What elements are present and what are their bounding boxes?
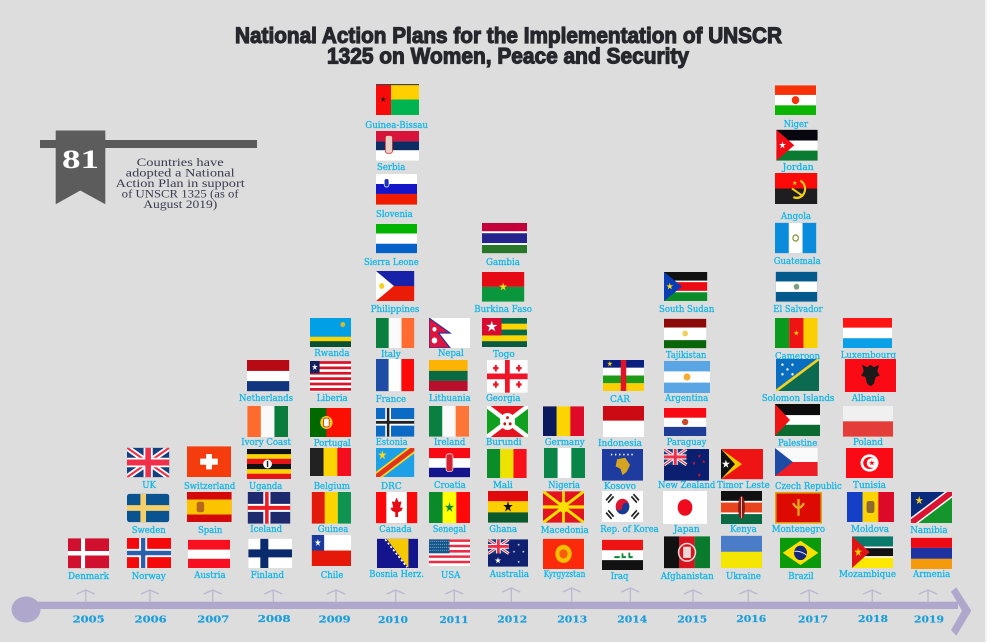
flag: Cameroon: Cameroon: [775, 352, 820, 362]
flag: Poland: [843, 406, 893, 448]
flag: Chile: Chile: [321, 571, 343, 581]
flag: Georgia: Georgia: [486, 394, 521, 404]
flag: Gambia: Gambia: [486, 258, 521, 268]
title: [235, 23, 782, 68]
callout text: Countries have: [137, 155, 224, 169]
title: 1325 on Women, Peace and Security: [327, 44, 690, 68]
flag: France: France: [376, 395, 406, 405]
flag: Uganda: Uganda: [249, 482, 283, 492]
flag: Afghanistan: [660, 536, 714, 582]
flag: Ivory Coast: [241, 406, 291, 448]
flag: Spain: Spain: [198, 526, 222, 536]
year labels: 2011: [440, 615, 468, 626]
year labels: 2005: [73, 614, 105, 626]
number 81: 81: [62, 145, 99, 174]
flag: Angola: [775, 173, 817, 222]
flag: Senegal: [429, 492, 470, 535]
flag: Uganda: [247, 449, 291, 492]
flag: Bosnia Herz.: [369, 539, 424, 580]
flag: Rep. of Korea: [600, 491, 659, 535]
flag: Mali: Mali: [493, 481, 513, 491]
flag: Portugal: Portugal: [314, 439, 351, 449]
flag: Angola: Angola: [780, 212, 812, 222]
flag: Germany: [543, 406, 586, 448]
flag: Slovenia: [376, 174, 417, 220]
flag: Cameroon: [775, 318, 820, 362]
flag: Solomon Islands: Solomon Islands: [762, 394, 835, 404]
flag: Burkina Faso: [474, 272, 532, 315]
flag: Australia: Australia: [489, 570, 530, 580]
flag: Mozambique: [839, 536, 896, 580]
flag: Indonesia: Indonesia: [598, 439, 643, 449]
year labels: 2009: [319, 614, 351, 626]
year labels: 2015: [677, 614, 707, 626]
flag: Ireland: [429, 406, 469, 448]
flag: Estonia: [376, 408, 414, 448]
flag: CAR: CAR: [610, 395, 630, 405]
flag: UK: UK: [142, 481, 156, 491]
flag: Montenegro: [772, 492, 825, 535]
flag: Sierra Leone: Sierra Leone: [364, 258, 419, 268]
flag: Australia: [488, 539, 530, 580]
flag: Ivory Coast: Ivory Coast: [241, 438, 291, 448]
flag: Liberia: Liberia: [317, 394, 348, 404]
flag: Austria: Austria: [193, 571, 226, 581]
flag: USA: USA: [441, 571, 461, 581]
flag: Moldova: [847, 492, 894, 535]
column: 2017: [762, 85, 842, 582]
flag: Macedonia: [541, 491, 589, 536]
flag: Ghana: Ghana: [489, 525, 518, 535]
flag: Canada: Canada: [379, 525, 412, 535]
flag: South Sudan: [659, 272, 714, 315]
flag: Rwanda: Rwanda: [314, 349, 350, 359]
column: 2018: [839, 318, 896, 580]
callout: 81 countries: [40, 130, 257, 211]
flag: Luxembourg: Luxembourg: [841, 351, 896, 361]
flag: Nepal: Nepal: [438, 349, 464, 359]
year labels: 2019: [914, 614, 944, 626]
year labels: 2006: [135, 614, 167, 626]
year labels: 2014: [617, 614, 648, 626]
flag: Paraguay: Paraguay: [667, 438, 707, 448]
flag: Jordan: [776, 130, 818, 173]
flag: Togo: Togo: [493, 350, 515, 360]
flag: Moldova: Moldova: [851, 525, 890, 535]
flag: Nigeria: Nigeria: [548, 481, 581, 491]
flag: Czech Republic: [775, 448, 842, 492]
flag: Tajikistan: Tajikistan: [666, 351, 706, 361]
timeline start dot: [12, 596, 40, 622]
timeline bar: [26, 602, 958, 609]
flag: Iraq: [602, 540, 643, 582]
year labels: 2012: [497, 614, 527, 626]
flag: Brazil: [780, 538, 821, 582]
year labels: 2016: [736, 614, 767, 625]
flag: South Sudan: South Sudan: [659, 305, 714, 315]
flag: France: [376, 359, 414, 405]
flag: Mali: [487, 449, 527, 491]
flag: New Zealand: New Zealand: [658, 481, 716, 491]
flag: Brazil: Brazil: [788, 572, 814, 582]
flag: Czech Republic: Czech Republic: [775, 482, 842, 492]
callout text: [116, 155, 245, 211]
timeline arrowhead: [951, 587, 971, 636]
flag: Slovenia: Slovenia: [376, 210, 413, 220]
year labels: 2008: [258, 614, 291, 625]
flag: Senegal: Senegal: [433, 525, 466, 535]
column: 2014: [598, 360, 659, 582]
flag: Namibia: Namibia: [910, 526, 948, 536]
flag: Afghanistan: Afghanistan: [660, 572, 714, 582]
column: 2019: [910, 492, 952, 580]
flag: Burundi: [486, 406, 528, 448]
flag: Denmark: Denmark: [68, 572, 110, 582]
flag: Paraguay: [664, 408, 707, 448]
column: 2011: [429, 318, 471, 581]
flag: Ukraine: Ukraine: [726, 572, 761, 582]
flag: Lithuania: Lithuania: [429, 394, 471, 404]
flag: Kyrgyzstan: [543, 539, 586, 580]
flag: Philippines: Philippines: [371, 305, 420, 315]
flag: Finland: [248, 539, 292, 581]
flag: Italy: Italy: [381, 350, 402, 360]
column: 2008: [239, 360, 293, 581]
flag: Belgium: Belgium: [314, 482, 350, 492]
flag: New Zealand: [658, 449, 716, 491]
flag: Canada: [376, 492, 417, 535]
flag: USA: [429, 539, 470, 581]
year labels: 2007: [197, 614, 229, 626]
flag: El Salvador: El Salvador: [773, 305, 823, 315]
year labels: 2013: [557, 614, 587, 626]
flag: Guatemala: [774, 223, 821, 267]
flag: Bosnia Herz.: Bosnia Herz.: [369, 570, 424, 580]
column: 2006: [127, 448, 171, 582]
column: 2016: [717, 449, 770, 582]
flag: Netherlands: Netherlands: [239, 394, 293, 404]
column: 2013: [541, 406, 589, 580]
year labels: 2010: [378, 615, 408, 626]
flag: Indonesia: [598, 406, 644, 449]
flag: Nigeria: [544, 448, 585, 491]
flag: Albania: [845, 359, 896, 404]
flag: Mozambique: Mozambique: [839, 570, 896, 580]
column: 2010: [364, 84, 428, 580]
flag: Montenegro: Montenegro: [772, 525, 825, 535]
flag: Timor Leste: Timor Leste: [717, 481, 770, 491]
year labels: 2018: [858, 614, 888, 625]
column: 2005: [68, 538, 110, 582]
flag: Argentina: [664, 361, 710, 404]
flag: Burkina Faso: Burkina Faso: [474, 305, 532, 315]
flag: Armenia: Armenia: [912, 570, 951, 580]
column: 2009: [310, 318, 351, 581]
flag: Tunisia: Tunisia: [853, 481, 887, 491]
callout text: August 2019): [143, 197, 217, 211]
flag: Palestine: Palestine: [778, 439, 817, 449]
flag: Guatemala: Guatemala: [774, 257, 821, 267]
flag: Serbia: Serbia: [377, 163, 406, 173]
flag: Sweden: Sweden: [132, 526, 166, 536]
flag: DRC: DRC: [381, 482, 402, 492]
flag: Croatia: [429, 448, 470, 491]
flag: Georgia: [486, 360, 528, 404]
timeline: [12, 587, 971, 636]
column: 2007: [184, 446, 236, 581]
flag: Tajikistan: [664, 319, 706, 361]
flag: Sierra Leone: [364, 224, 419, 268]
bookmark badge: [56, 130, 105, 204]
flag: Albania: Albania: [851, 394, 886, 404]
flag: Guinea: [312, 492, 351, 535]
flag: Belgium: [310, 448, 351, 492]
flag: Croatia: Croatia: [434, 481, 466, 491]
flag: Guinea: Guinea: [318, 525, 349, 535]
flag: Niger: Niger: [784, 120, 809, 130]
flag: Niger: [775, 85, 816, 130]
flag: Nepal: [429, 318, 470, 359]
flag: Italy: [376, 318, 414, 360]
flag: Solomon Islands: [762, 359, 835, 404]
flag: Japan: Japan: [673, 525, 700, 535]
title: National Action Plans for the Implementation of UNSCR: [235, 23, 782, 48]
flag: Lithuania: [429, 360, 471, 404]
flag: Liberia: [310, 361, 351, 404]
flag: Iceland: Iceland: [250, 525, 282, 535]
flag: Rwanda: [310, 318, 351, 359]
callout text: Action Plan in support: [116, 176, 245, 190]
flag: Luxembourg: [841, 318, 896, 361]
flag: Rep. of Korea: Rep. of Korea: [600, 525, 659, 535]
flag: Germany: Germany: [545, 438, 586, 448]
year labels: [73, 614, 944, 626]
flag: Argentina: Argentina: [664, 394, 709, 404]
column: 2015: [658, 272, 716, 582]
flag: Palestine: [775, 404, 820, 449]
callout text: adopted a National: [126, 166, 235, 180]
flag: Ireland: Ireland: [434, 438, 466, 448]
flag: Guinea-Bissau: Guinea-Bissau: [365, 121, 428, 131]
flag: Macedonia: Macedonia: [541, 526, 589, 536]
flag: Gambia: [482, 223, 527, 268]
flag: DRC: [376, 448, 414, 492]
flag: Poland: Poland: [853, 438, 883, 448]
flag: Netherlands: [239, 360, 293, 404]
flag: Japan: [663, 491, 707, 535]
flag: Burundi: Burundi: [486, 438, 522, 448]
flag: Kosovo: Kosovo: [604, 482, 636, 492]
flag: Kosovo: [602, 449, 643, 492]
flag: Finland: Finland: [251, 571, 284, 581]
ribbon bar: [40, 140, 257, 148]
column: 2012: [474, 223, 532, 580]
flag: Norway: Norway: [132, 572, 167, 582]
callout text: of UNSCR 1325 (as of: [122, 186, 239, 200]
flag: Iraq: Iraq: [611, 572, 629, 582]
flag: Serbia: [376, 131, 419, 173]
flag: Togo: [482, 318, 527, 360]
year labels: 2017: [798, 614, 828, 626]
flag: Guinea-Bissau: [365, 84, 428, 131]
flag: Jordan: Jordan: [782, 163, 814, 173]
flag: Tunisia: [846, 448, 893, 491]
flag: Kenya: Kenya: [730, 525, 757, 535]
flag: Estonia: Estonia: [376, 438, 408, 448]
year tick arrows: [77, 588, 937, 602]
flag: El Salvador: [773, 272, 823, 315]
flag: CAR: [603, 360, 644, 405]
flag: Iceland: [248, 492, 290, 535]
flag: Switzerland: Switzerland: [184, 482, 236, 492]
flag: Kyrgyzstan: Kyrgyzstan: [544, 570, 586, 580]
flag: Portugal: [310, 408, 351, 449]
flag: Philippines: [371, 271, 420, 315]
flag: Chile: [312, 535, 351, 581]
flag: Ghana: [488, 491, 528, 535]
